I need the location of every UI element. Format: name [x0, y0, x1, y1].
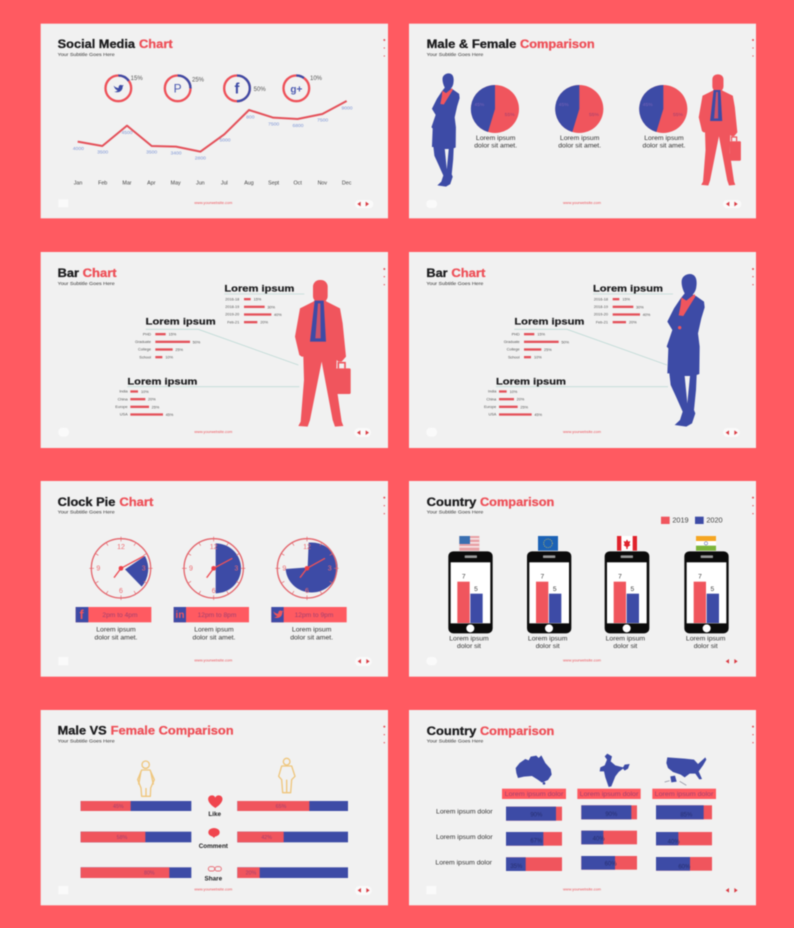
bar: comment left 58%	[81, 832, 191, 842]
row label 1: Lorem ipsum dolor	[436, 808, 493, 815]
footer: www.yourwebsite.com	[194, 430, 232, 434]
footer	[58, 428, 371, 437]
bar group: lorem ipsum 3: 25%	[152, 405, 160, 409]
line chart: 7500	[317, 118, 328, 124]
month axis: Apr	[147, 180, 156, 186]
phone 4 caption: dolor sit	[694, 643, 718, 650]
pie 1 caption: Lorem ipsum	[476, 135, 515, 142]
bar group: lorem ipsum 2: 50%	[193, 340, 201, 344]
column 3 bars: 85%	[680, 813, 693, 819]
connector lines	[127, 294, 304, 387]
month axis: Jul	[221, 180, 228, 186]
bar group: lorem ipsum 2: School	[508, 355, 520, 359]
caption 2: dolor sit amet.	[193, 634, 236, 641]
bar group: lorem ipsum 1: Lorem ipsum	[593, 283, 663, 293]
column 1 bars: 35%	[510, 864, 523, 870]
panel: male vs female comparison	[41, 710, 388, 905]
title: bar chart: Chart	[451, 267, 485, 280]
title: bar chart	[58, 267, 117, 280]
side dots	[383, 268, 385, 285]
phone 1 caption: dolor sit	[457, 643, 481, 650]
column 3 bars: 40%	[668, 839, 680, 845]
phone 1: 5	[474, 586, 478, 593]
tag 2: Lorem ipsum dolor	[580, 791, 639, 798]
tag: linkedin 12pm to 8pm: in	[176, 610, 184, 621]
icon: facebook ring 50%	[224, 75, 266, 101]
flag: USA	[459, 536, 479, 551]
tag: twitter 12pm to 9pm: 12pm to 9pm	[295, 612, 334, 619]
bar group: lorem ipsum 1: 2019-20	[594, 313, 608, 317]
bar: comment left 58%: 58%	[117, 835, 128, 841]
column 1 bars: 67%	[530, 838, 543, 844]
pie 3 caption: dolor sit amet.	[643, 142, 686, 149]
bar: comment right 42%	[237, 832, 348, 842]
male silhouette	[699, 74, 741, 185]
bar group: lorem ipsum 3: 20%	[148, 398, 156, 402]
line chart: 3500	[97, 150, 108, 156]
footer: www.yourwebsite.com	[563, 659, 601, 663]
month axis	[74, 180, 352, 186]
male silhouette	[295, 280, 351, 427]
pie 1: 45%	[474, 102, 485, 108]
column 2 bars: 60%	[605, 862, 617, 868]
bar group: lorem ipsum 2: 10%	[534, 356, 542, 360]
bar group: lorem ipsum 1: 15%	[254, 298, 262, 302]
bar: share left 80%: 80%	[144, 871, 155, 877]
column 3 bars	[656, 805, 712, 871]
month axis: Nov	[318, 180, 327, 186]
title: country comparison: Comparison	[480, 725, 554, 738]
tag: linkedin 12pm to 8pm	[174, 607, 249, 622]
phone 2 caption: dolor sit	[536, 643, 560, 650]
panel: bar chart male	[41, 252, 388, 448]
icon: pinterest ring 25%: P	[174, 82, 182, 96]
icon and label: share	[205, 867, 223, 882]
phone 3: 5	[630, 586, 634, 593]
line chart: 800	[246, 115, 255, 121]
subtitle: Your Subtitle Goes Here	[58, 281, 115, 287]
line chart: 4500	[121, 130, 133, 136]
phone 1 caption: Lorem ipsum	[449, 636, 489, 643]
phone 4 caption: Lorem ipsum	[686, 636, 725, 643]
line chart	[73, 101, 353, 161]
bar group: lorem ipsum 3: Lorem ipsum	[496, 376, 566, 386]
column 2 bars	[581, 805, 637, 870]
clock 2	[182, 537, 245, 600]
bar: like right 65%: 65%	[276, 804, 287, 810]
title: social media chart: Social Media	[58, 38, 136, 51]
bar group: lorem ipsum 1: Feb-21	[596, 320, 608, 324]
phone 2	[527, 551, 571, 633]
bar group: lorem ipsum 3: India	[119, 390, 129, 394]
bar group: lorem ipsum 1: 40%	[274, 313, 282, 317]
icon and label: comment: Comment	[199, 843, 229, 850]
title: country comparison: Comparison	[480, 496, 554, 509]
icon and label: comment	[199, 828, 229, 850]
title: social media chart	[58, 38, 173, 51]
phone 3	[605, 551, 649, 633]
clock 2: 3	[234, 566, 238, 573]
bar group: lorem ipsum 3: Lorem ipsum	[127, 376, 197, 386]
bar group: lorem ipsum 3: 20%	[517, 398, 525, 402]
title: country comparison	[427, 725, 554, 738]
footer	[426, 428, 740, 437]
bar group: lorem ipsum 1	[224, 283, 294, 325]
footer: www.yourwebsite.com	[194, 201, 232, 205]
bar: like right 65%	[237, 801, 348, 811]
tag 3	[652, 789, 716, 799]
subtitle: Your Subtitle Goes Here	[427, 739, 484, 745]
bar: share right 20%	[237, 867, 348, 878]
line chart: 5000	[219, 138, 231, 144]
title: bar chart: Bar	[426, 267, 448, 280]
pie 1 caption: dolor sit amet.	[474, 142, 517, 149]
phone 1: 7	[462, 574, 466, 581]
clock 3: 3	[328, 566, 332, 573]
connector lines	[496, 294, 673, 387]
bar group: lorem ipsum 1: Feb-21	[227, 320, 239, 324]
bar group: lorem ipsum 3: 10%	[510, 390, 518, 394]
bar group: lorem ipsum 3: China	[486, 397, 497, 401]
phone 3: 7	[618, 574, 622, 581]
caption 3: Lorem ipsum	[292, 627, 331, 634]
panel: social media chart	[41, 24, 388, 218]
clock 2: 9	[189, 566, 193, 573]
bar: share left 80%	[81, 867, 191, 878]
bar group: lorem ipsum 1: 20%	[260, 321, 269, 325]
bar group: lorem ipsum 3: 10%	[141, 390, 149, 394]
icon: google plus ring 10%	[283, 75, 323, 101]
phone 4: 5	[710, 586, 714, 593]
caption 3: dolor sit amet.	[290, 634, 333, 641]
caption 2: Lorem ipsum	[194, 627, 234, 634]
bar group: lorem ipsum 1: 2018-19	[225, 305, 239, 309]
bar group: lorem ipsum 2: 10%	[165, 356, 174, 360]
subtitle: Your Subtitle Goes Here	[427, 510, 484, 516]
bar group: lorem ipsum 2: Graduate	[135, 340, 151, 344]
bar group: lorem ipsum 1: 40%	[643, 313, 651, 317]
footer	[426, 886, 738, 894]
title: clock pie chart: Clock Pie	[58, 496, 116, 509]
panel: male and female comparison	[409, 24, 756, 218]
title: male vs female comparison	[58, 725, 234, 738]
bar group: lorem ipsum 1: Lorem ipsum	[224, 283, 294, 293]
phone 4: 7	[698, 574, 702, 581]
footer	[58, 657, 372, 666]
title: male and female comparison: Male & Female	[427, 38, 517, 51]
title: clock pie chart: Chart	[119, 496, 153, 509]
pie 3: 45%	[643, 102, 653, 108]
title: country comparison: Country	[427, 725, 477, 738]
bar: comment right 42%: 42%	[261, 835, 272, 841]
caption 1: Lorem ipsum	[96, 627, 136, 634]
icon: facebook ring 50%: 50%	[254, 87, 266, 93]
footer	[58, 199, 373, 208]
footer: www.yourwebsite.com	[563, 430, 601, 434]
clock 1: 12	[117, 544, 125, 551]
column 1 bars	[506, 807, 562, 871]
tag 2	[577, 789, 641, 799]
line chart: 2800	[195, 155, 206, 161]
bar group: lorem ipsum 2: Lorem ipsum	[514, 317, 584, 327]
phone 2: 7	[540, 574, 544, 581]
legend: 2020	[706, 516, 723, 525]
bar group: lorem ipsum 3: China	[118, 397, 129, 401]
title: bar chart: Bar	[58, 267, 80, 280]
footer: www.yourwebsite.com	[194, 888, 232, 892]
tag: facebook 2pm to 4pm	[76, 607, 151, 622]
bar group: lorem ipsum 1	[593, 283, 663, 325]
bar group: lorem ipsum 2	[504, 317, 584, 360]
bar group: lorem ipsum 1: 2016-18	[594, 297, 608, 301]
row label 2: Lorem ipsum dolor	[436, 834, 493, 841]
flag: Canada	[617, 536, 637, 551]
female silhouette	[431, 73, 460, 187]
panel: country comparison phones	[409, 481, 756, 677]
side dots	[383, 497, 385, 514]
tag: linkedin 12pm to 8pm: 12pm to 8pm	[198, 612, 237, 619]
month axis: Mar	[122, 180, 132, 186]
bar: share right 20%: 20%	[246, 871, 257, 877]
bar group: lorem ipsum 2: College	[138, 348, 151, 352]
clock 1: 9	[96, 566, 100, 573]
bar group: lorem ipsum 3: USA	[488, 413, 497, 417]
subtitle: Your Subtitle Goes Here	[427, 52, 484, 58]
title: male and female comparison: Comparison	[520, 38, 595, 51]
phone 3 caption: dolor sit	[613, 643, 637, 650]
side dots	[752, 268, 754, 285]
clock 1	[89, 537, 153, 600]
bar group: lorem ipsum 2: 25%	[544, 348, 552, 352]
bar group: lorem ipsum 2: 50%	[561, 340, 570, 344]
icon: twitter ring 15%: 15%	[131, 76, 143, 82]
panel: bar chart female	[409, 252, 756, 448]
title: male vs female comparison: Female Comparison	[111, 725, 234, 738]
bar group: lorem ipsum 2: PHD	[143, 332, 151, 336]
map: India	[600, 754, 630, 787]
panel: country comparison maps	[409, 710, 756, 905]
female silhouette	[667, 274, 705, 427]
legend	[661, 516, 723, 525]
icon: google plus ring 10%: g+	[290, 84, 302, 95]
month axis: Aug	[244, 180, 254, 186]
month axis: Oct	[294, 180, 302, 186]
line chart: 6800	[292, 123, 304, 129]
title: country comparison	[427, 496, 554, 509]
clock 2: 12	[210, 544, 218, 551]
bar group: lorem ipsum 3: India	[488, 390, 497, 394]
footer	[426, 657, 738, 665]
title: male and female comparison	[427, 38, 595, 51]
month axis: Jan	[74, 180, 82, 186]
column 1 bars: 90%	[530, 813, 543, 819]
tag: twitter 12pm to 9pm	[271, 607, 347, 622]
clock 2: 6	[212, 588, 216, 595]
pie 3: 55%	[673, 112, 684, 118]
month axis: Sept	[268, 180, 280, 186]
icon: pinterest ring 25%	[165, 75, 205, 101]
bar group: lorem ipsum 2: 15%	[537, 333, 546, 337]
month axis: Jun	[196, 180, 205, 186]
icon: twitter ring 15%	[105, 75, 143, 101]
bar: like left 45%: 45%	[113, 804, 124, 810]
tag: facebook 2pm to 4pm: f	[80, 608, 85, 622]
title: bar chart	[426, 267, 485, 280]
pie 1	[471, 85, 519, 133]
clock 1: 6	[119, 588, 123, 595]
pie 3	[639, 85, 687, 133]
icon and label: like	[208, 795, 223, 818]
icon and label: share: Share	[205, 875, 223, 882]
month axis: Feb	[98, 180, 107, 186]
phone 3 caption: Lorem ipsum	[606, 636, 645, 643]
line chart: 4000	[73, 146, 84, 152]
bar group: lorem ipsum 2: 15%	[169, 333, 177, 337]
title: clock pie chart	[58, 496, 153, 509]
line chart: 9000	[341, 105, 353, 111]
side dots	[752, 726, 754, 743]
bar: like left 45%	[81, 801, 191, 811]
map: USA	[665, 757, 706, 785]
column 3 bars: 60%	[678, 864, 691, 870]
column 2 bars: 90%	[605, 812, 618, 818]
footer: www.yourwebsite.com	[563, 201, 601, 205]
bar group: lorem ipsum 3: USA	[120, 413, 128, 417]
bar group: lorem ipsum 1: 30%	[267, 305, 276, 309]
line chart: 3400	[170, 150, 182, 156]
side dots	[383, 39, 385, 57]
pie 2: 55%	[589, 112, 600, 118]
row label 3: Lorem ipsum dolor	[435, 860, 493, 867]
bar group: lorem ipsum 2	[135, 317, 216, 360]
bar group: lorem ipsum 1: 2018-19	[594, 305, 608, 309]
clock 3: 12	[303, 544, 311, 551]
bar group: lorem ipsum 2: Graduate	[504, 340, 520, 344]
tag 3: Lorem ipsum dolor	[655, 791, 714, 798]
phone 2: 5	[553, 586, 557, 593]
subtitle: Your Subtitle Goes Here	[426, 281, 484, 287]
pie 2: 45%	[559, 102, 569, 108]
icon: facebook ring 50%: f	[235, 82, 240, 98]
clock 3: 9	[282, 566, 286, 573]
column 2 bars: 40%	[593, 837, 605, 843]
tag 1	[502, 789, 566, 799]
tag: facebook 2pm to 4pm: 2pm to 4pm	[102, 612, 138, 619]
bar group: lorem ipsum 3: 45%	[166, 413, 174, 417]
clock 3: 6	[305, 588, 309, 595]
side dots	[383, 726, 385, 743]
subtitle: Your Subtitle Goes Here	[58, 52, 115, 58]
bar group: lorem ipsum 1: 2019-20	[225, 313, 239, 317]
footer: www.yourwebsite.com	[194, 659, 232, 663]
legend: 2019	[672, 516, 689, 525]
footer	[426, 200, 741, 208]
pie 2 caption: Lorem ipsum	[560, 135, 599, 142]
bar group: lorem ipsum 1: 2016-18	[225, 297, 239, 301]
bar group: lorem ipsum 1: 15%	[622, 298, 631, 302]
title: male vs female comparison: Male VS	[58, 725, 107, 738]
bar group: lorem ipsum 1: 30%	[636, 305, 644, 309]
line chart: 7500	[268, 122, 279, 128]
bar group: lorem ipsum 1: 20%	[629, 321, 637, 325]
line chart: 3500	[146, 150, 157, 156]
clock 3	[275, 537, 339, 600]
pie 2 caption: dolor sit amet.	[558, 142, 601, 149]
flag: India	[696, 536, 716, 551]
bar group: lorem ipsum 3: 25%	[520, 405, 529, 409]
bar group: lorem ipsum 2: PHD	[512, 332, 520, 336]
pie 3 caption: Lorem ipsum	[644, 135, 684, 142]
bar group: lorem ipsum 3	[115, 376, 197, 417]
month axis: May	[171, 180, 181, 186]
bar group: lorem ipsum 2: School	[139, 355, 151, 359]
side dots	[752, 497, 754, 514]
title: country comparison: Country	[427, 496, 477, 509]
footer	[58, 886, 372, 895]
pie 1: 55%	[505, 112, 515, 118]
title: bar chart: Chart	[83, 267, 117, 280]
icon: google plus ring 10%: 10%	[310, 76, 323, 82]
icon: male outline	[279, 758, 295, 793]
clock 1: 3	[142, 566, 146, 573]
icon: female outline	[138, 761, 154, 796]
bar group: lorem ipsum 2: Lorem ipsum	[146, 317, 216, 327]
month axis: Dec	[342, 180, 352, 186]
phone 2 caption: Lorem ipsum	[528, 636, 567, 643]
bar group: lorem ipsum 2: 25%	[175, 348, 184, 352]
caption 1: dolor sit amet.	[95, 634, 138, 641]
title: social media chart: Chart	[139, 38, 173, 51]
bar group: lorem ipsum 3: Europe	[484, 405, 496, 409]
icon and label: like: Like	[208, 811, 221, 818]
map: Australia	[516, 755, 552, 785]
bar group: lorem ipsum 2: College	[507, 348, 520, 352]
footer: www.yourwebsite.com	[563, 888, 601, 892]
phone 4	[684, 551, 729, 633]
bar group: lorem ipsum 3: 45%	[534, 413, 543, 417]
side dots	[752, 39, 754, 57]
pie 2	[555, 85, 603, 133]
flag: EU	[538, 536, 558, 551]
panel: clock pie chart	[41, 481, 388, 677]
icon: pinterest ring 25%: 25%	[192, 77, 205, 83]
subtitle: Your Subtitle Goes Here	[58, 510, 115, 516]
phone 1	[448, 551, 493, 633]
tag 1: Lorem ipsum dolor	[505, 791, 564, 798]
bar group: lorem ipsum 3	[484, 376, 566, 417]
subtitle: Your Subtitle Goes Here	[58, 738, 115, 744]
bar group: lorem ipsum 3: Europe	[115, 405, 128, 409]
